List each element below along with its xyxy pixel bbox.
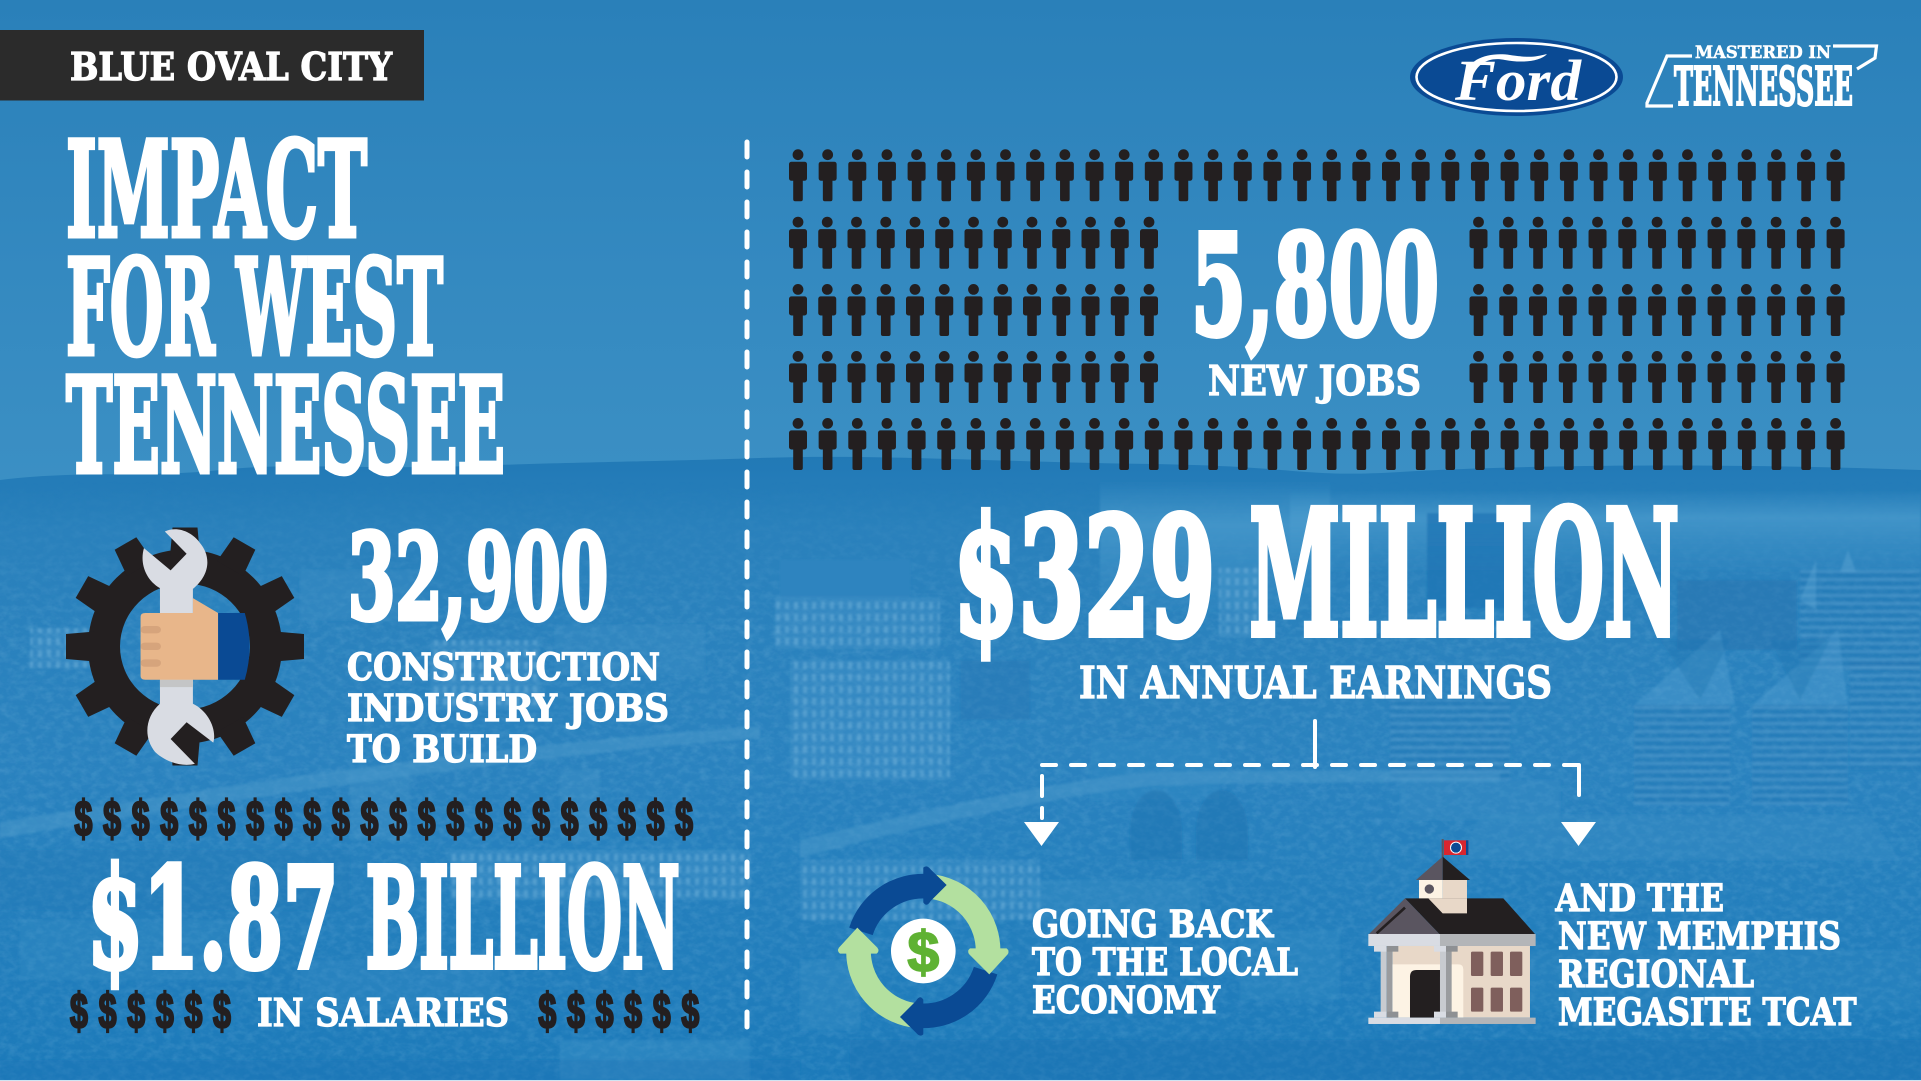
blue arrow head bottom [900,997,923,1036]
green arrow left [838,928,920,1016]
title: FOR WEST [66,231,443,386]
in salaries row with dollar signs [70,983,699,1039]
stat: 5,800 new jobs [1191,204,1439,405]
stat: $329 million [953,472,1679,709]
text: going back to the local economy [1032,902,1298,1022]
coin [891,919,956,983]
text: going back to the local economy: TO THE LOCAL [1032,940,1298,984]
text: BILLION [366,837,680,1000]
logo: Mastered in Tennessee [1647,43,1876,118]
blue arrow head top [923,866,947,905]
logo: Mastered in Tennessee: MASTERED IN [1695,43,1831,62]
stat: $1.87 billion: $1.87 [87,837,339,1000]
stat: $329 million: IN ANNUAL EARNINGS [1079,658,1552,709]
dashed divider [744,142,750,1030]
icon: gear, wrench and hand [66,528,304,766]
connector arrows [1024,721,1596,846]
sleeve [218,613,250,680]
in salaries row with dollar signs: IN SALARIES [257,990,509,1035]
stat: 32,900 construction jobs: INDUSTRY JOBS [347,686,669,730]
logo: Ford oval [1410,38,1623,116]
logo: Ford oval: Ford [1454,48,1582,113]
text: and the new Memphis regional megasite TCAT: REGIONAL [1558,952,1754,996]
icon: TCAT school building [1368,839,1536,1024]
hand [141,598,218,680]
dollar sign row top: $$$$$$$$$$$$$$$$$$$$$$ [74,791,693,847]
stat: 32,900 construction jobs: TO BUILD [347,727,537,771]
icon: circular money arrows [838,866,1009,1036]
text: going back to the local economy: GOING BACK [1032,902,1275,946]
stat: 32,900 construction jobs [347,508,669,771]
text: and the new Memphis regional megasite TCAT [1555,876,1857,1034]
row 1 of people [789,149,1845,201]
in salaries row with dollar signs: $$$$$$ [70,983,231,1039]
text: going back to the local economy: ECONOMY [1032,978,1220,1022]
stat: 32,900 construction jobs: CONSTRUCTION [347,645,660,689]
in salaries row with dollar signs: $$$$$$ [538,983,699,1039]
row 5 of people [789,418,1845,470]
title [66,113,505,504]
stat: $329 million: $329 [953,482,1215,674]
stat: 5,800 new jobs: NEW JOBS [1208,357,1421,405]
gear [66,528,304,766]
text: TENNESSEE [66,349,505,504]
text: and the new Memphis regional megasite TCAT: MEGASITE TCAT [1558,990,1857,1034]
rows 2-4 right people [1470,217,1845,403]
banner: Blue Oval City [0,30,424,100]
stat: 32,900 construction jobs: 32,900 [348,508,608,646]
wrench [143,529,214,765]
title: IMPACT [66,113,367,268]
green arrow right [927,886,1009,974]
stat: 5,800 new jobs: 5,800 [1191,204,1439,367]
blue arcs [861,886,986,1016]
icon: circular money arrows: $ [907,921,939,985]
people pictogram: 5,800 new jobs [789,149,1845,470]
flag [1442,839,1468,857]
text: and the new Memphis regional megasite TCAT: AND THE [1555,876,1724,920]
banner: Blue Oval City: BLUE OVAL CITY [70,44,393,89]
text: and the new Memphis regional megasite TCAT: NEW MEMPHIS [1558,914,1841,958]
rows 2-4 left people [789,217,1158,403]
